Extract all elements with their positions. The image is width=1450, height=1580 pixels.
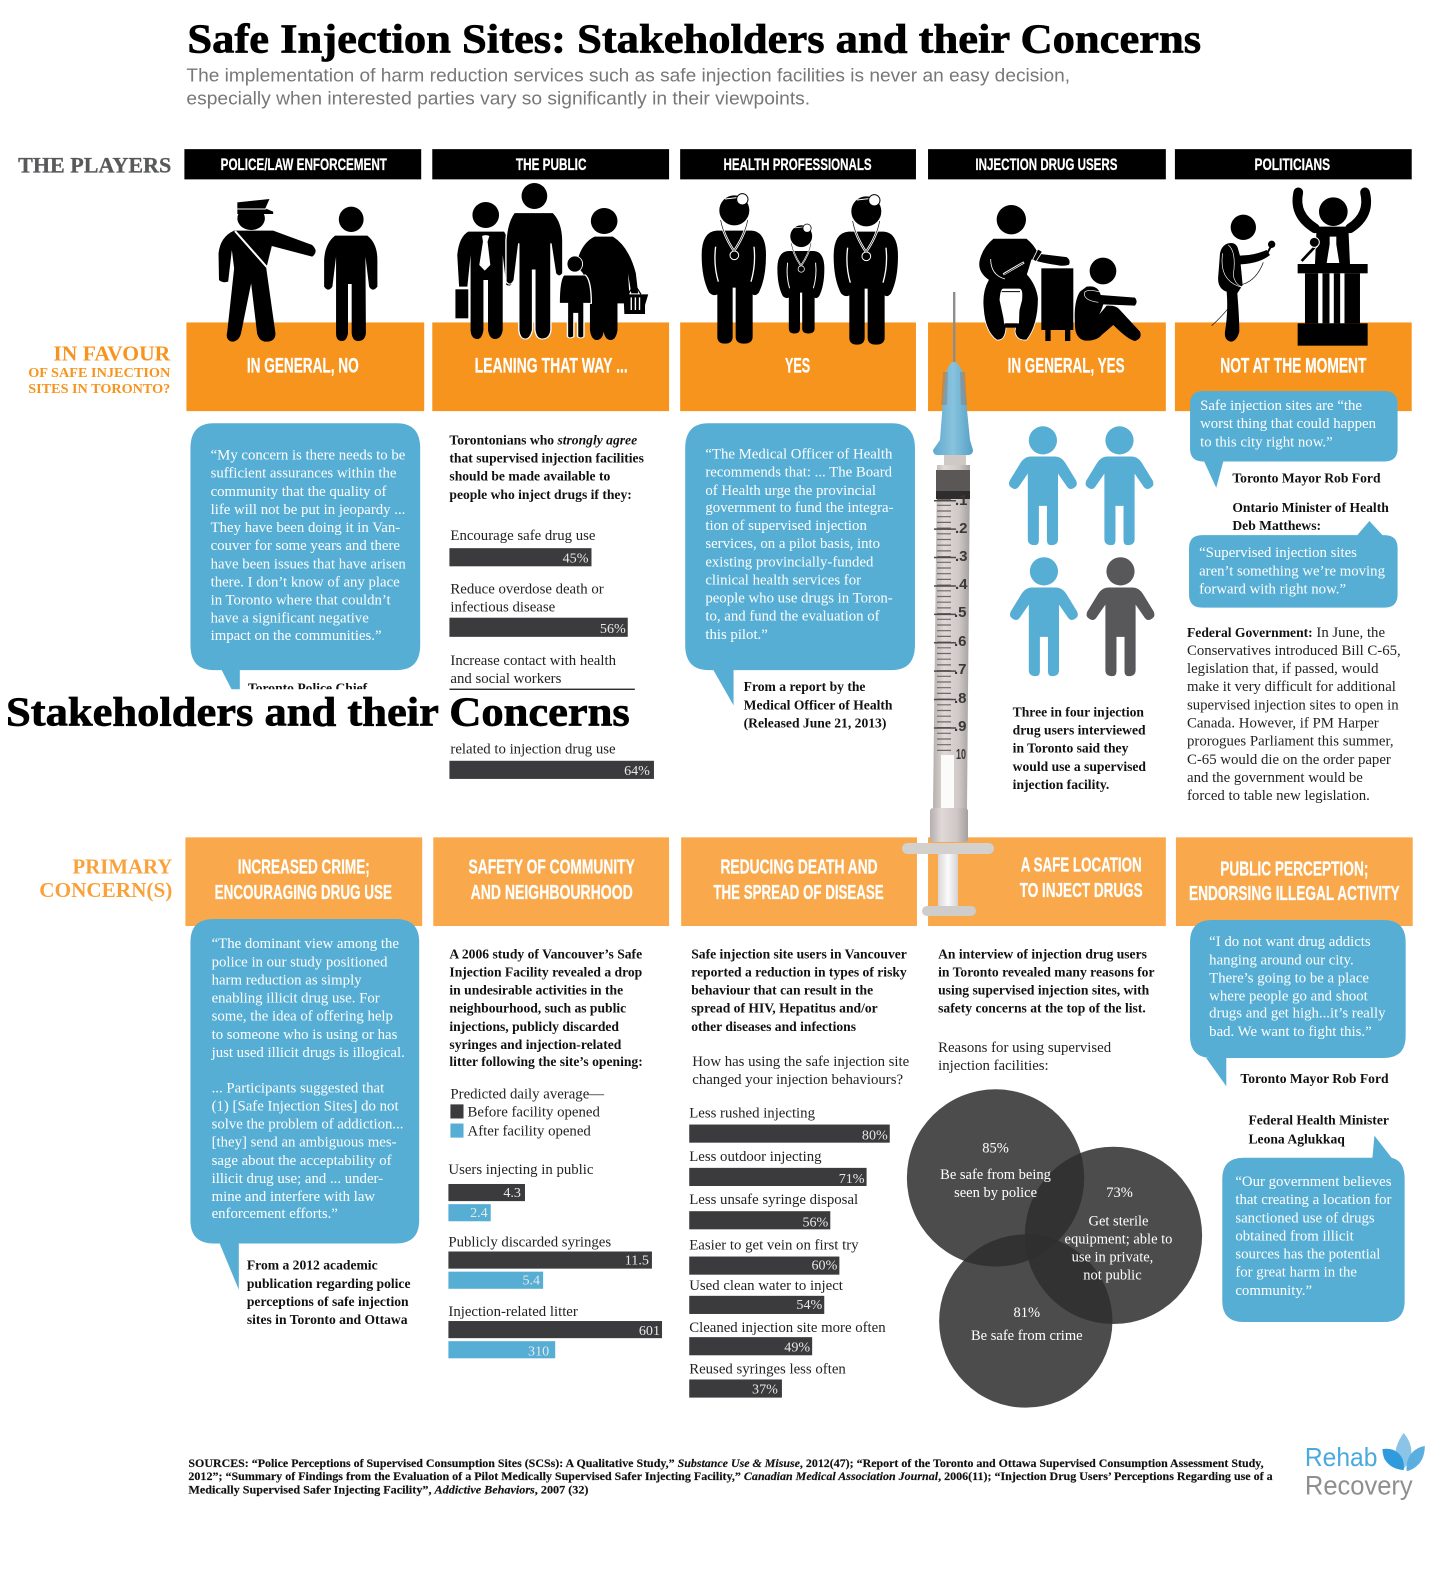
subtitle: The implementation of harm reduction services such as safe injection facilities is never an easy decision,	[186, 66, 1070, 86]
federal government note	[1187, 625, 1401, 804]
bar: increase contact: and social workers	[450, 671, 562, 687]
concern bar: health professionals: THE SPREAD OF DISEASE	[713, 882, 884, 904]
interview text: safety concerns at the top of the list.	[938, 1001, 1146, 1016]
source note: publication regarding police	[247, 1276, 411, 1291]
survey intro: should be made available to	[449, 469, 610, 484]
icon: police officer and man	[219, 199, 377, 342]
attribution: Medical Officer of Health	[744, 697, 893, 712]
bar: reduce overdose	[449, 582, 628, 637]
statistic text: in Toronto said they	[1013, 741, 1129, 756]
study text: behaviour that can result in the	[691, 983, 873, 998]
bar: reused syringes	[689, 1361, 846, 1398]
header: police	[184, 149, 421, 179]
quote text: community that the quality of	[211, 484, 387, 500]
panel: reducing disease	[689, 946, 910, 1398]
study text	[449, 946, 643, 1069]
quote text: solve the problem of addiction...	[212, 1117, 404, 1133]
header: health professionals	[680, 149, 916, 179]
quote text: have a significant negative	[211, 611, 369, 627]
venn diagram	[907, 1089, 1202, 1408]
quote text: people who use drugs in Toron-	[705, 591, 893, 607]
panel: police concern	[190, 919, 419, 1327]
quote: Rob Ford: “I do not want drug addicts	[1209, 934, 1371, 950]
illustration: syringe: .6	[954, 633, 966, 650]
quote: Leona Aglukkaq: “Our government believes	[1235, 1174, 1392, 1190]
icon: person 1	[1009, 426, 1077, 545]
favour bar: drug users: IN GENERAL, YES	[1008, 354, 1125, 377]
illustration: syringe: .8	[954, 690, 966, 707]
survey intro: people who inject drugs if they:	[449, 487, 632, 502]
icon: leaves	[1382, 1433, 1425, 1471]
quote text: [they] send an ambiguous mes-	[212, 1135, 397, 1151]
quote text: life will not be put in jeopardy ...	[211, 502, 405, 518]
bar: less outdoor	[689, 1149, 867, 1187]
icon: politicians at podium	[1212, 192, 1368, 346]
quote text: tion of supervised injection	[705, 518, 867, 534]
survey intro: that supervised injection facilities	[449, 451, 644, 466]
quote: Deb Matthews	[1199, 545, 1386, 598]
chart question	[692, 1054, 910, 1088]
panel: police quote	[190, 423, 420, 705]
attribution: Rob Ford: Toronto Mayor Rob Ford	[1240, 1071, 1389, 1086]
doctor 3	[834, 195, 898, 345]
concern bar: health professionals	[681, 837, 917, 926]
row label: in favour	[28, 342, 171, 397]
concern bar: public: AND NEIGHBOURHOOD	[471, 882, 633, 904]
study text: Safe injection site users in Vancouver	[691, 946, 907, 961]
study text: reported a reduction in types of risky	[691, 964, 907, 979]
bar: related to injection drug use: 64%	[624, 763, 650, 779]
bar: less rushed: Less rushed injecting	[689, 1105, 816, 1121]
panel: safe location	[907, 946, 1202, 1408]
favour bar: health professionals: YES	[785, 354, 810, 377]
bar: encourage safe drug use: 45%	[563, 550, 589, 566]
interview text: in Toronto revealed many reasons for	[938, 964, 1155, 979]
source note	[247, 1258, 411, 1327]
chart: publicly discarded syringes: 5.4	[522, 1273, 540, 1289]
quote text: government to fund the integra-	[705, 500, 894, 516]
icon: three doctors	[702, 194, 898, 345]
concern bar: drug users: A SAFE LOCATION	[1021, 855, 1142, 877]
title: Safe Injection Sites: Stakeholders and their Concerns	[187, 15, 1201, 61]
quote text: sage about the acceptability of	[212, 1153, 392, 1169]
concern bar: police: ENCOURAGING DRUG USE	[215, 882, 392, 904]
row label: primary concerns: CONCERN(S)	[39, 878, 172, 902]
federal government note: Federal Government: In June, the	[1187, 625, 1385, 641]
sources	[188, 1457, 1273, 1496]
logo: Rehab Recovery	[1305, 1433, 1425, 1500]
bar: cleaned site	[689, 1320, 886, 1355]
bar: related to injection drug use: related to injection drug use	[450, 742, 616, 758]
bar: reduce overdose: infectious disease	[450, 600, 556, 616]
chart: users injecting in public: 2.4	[470, 1205, 488, 1221]
row label: primary concerns: PRIMARY	[73, 855, 172, 879]
row label: in favour: SITES IN TORONTO?	[28, 381, 170, 397]
concern bar: public: SAFETY OF COMMUNITY	[469, 857, 635, 879]
quote: Leona Aglukkaq: for great harm in the	[1235, 1265, 1357, 1281]
bar: less unsafe disposal	[689, 1192, 858, 1230]
study text: Injection Facility revealed a drop	[449, 964, 643, 979]
quote: Rob Ford: Safe injection sites are “the	[1200, 398, 1362, 414]
chart: users injecting in public: Users injecting in public	[448, 1162, 594, 1178]
study text: A 2006 study of Vancouver’s Safe	[449, 946, 642, 961]
speech bubble: Leona Aglukkaq	[1222, 1136, 1405, 1322]
speech bubble: Rob Ford	[1190, 920, 1406, 1086]
study text: spread of HIV, Hepatitus and/or	[691, 1001, 878, 1016]
quote text: enforcement efforts.”	[212, 1206, 338, 1222]
quote text: in Toronto where that couldn’t	[211, 593, 392, 609]
statistic text: Three in four injection	[1013, 704, 1144, 719]
quote text: some, the idea of offering help	[212, 1009, 393, 1025]
statistic text: injection facility.	[1013, 777, 1109, 792]
speech bubble	[190, 423, 420, 705]
attribution: Rob Ford: Toronto Mayor Rob Ford	[1232, 471, 1381, 486]
federal government note: C-65 would die on the order paper	[1187, 752, 1391, 768]
quote: Leona Aglukkaq: that creating a location for	[1235, 1192, 1392, 1208]
illustration: syringe: .2	[955, 520, 967, 537]
quote text: just used illicit drugs is illogical.	[211, 1045, 405, 1061]
legend	[450, 1086, 604, 1140]
quote text: recommends that: ... The Board	[705, 465, 893, 481]
concern bar: police	[185, 837, 422, 926]
concern bar: drug users	[928, 837, 1166, 926]
venn diagram: use in private,	[1072, 1250, 1153, 1266]
attribution: (Released June 21, 2013)	[744, 716, 886, 732]
quote text: of Health urge the provincial	[705, 483, 876, 499]
interview text: An interview of injection drug users	[938, 946, 1147, 961]
quote: Deb Matthews: aren’t something we’re moving	[1199, 563, 1386, 579]
quote text: have been issues that have arisen	[211, 556, 406, 572]
quote: Rob Ford: worst thing that could happen	[1200, 416, 1377, 432]
bar: less unsafe disposal: Less unsafe syringe disposal	[689, 1192, 858, 1208]
bar: reduce overdose: 56%	[600, 621, 626, 637]
quote text	[211, 936, 405, 1222]
interview text: using supervised injection sites, with	[938, 983, 1150, 998]
interview text	[938, 946, 1155, 1016]
bar: clean water: 54%	[796, 1297, 822, 1313]
study text: other diseases and infections	[691, 1019, 856, 1034]
header: public: THE PUBLIC	[516, 155, 586, 174]
header: health professionals: HEALTH PROFESSIONALS	[723, 155, 872, 174]
panel: public survey	[449, 432, 644, 687]
chart heading	[938, 1040, 1112, 1074]
quote: Leona Aglukkaq	[1235, 1174, 1392, 1299]
quote text: impact on the communities.”	[211, 628, 382, 644]
bar: clean water	[689, 1278, 844, 1314]
attribution: Deb Matthews: Ontario Minister of Health	[1232, 500, 1389, 515]
quote text: ... Participants suggested that	[212, 1080, 385, 1096]
bar: cleaned site: 49%	[784, 1339, 810, 1355]
quote text: couver for some years and there	[211, 538, 400, 554]
source note: perceptions of safe injection	[247, 1294, 409, 1309]
venn diagram: 73%	[1106, 1185, 1133, 1201]
chart heading: injection facilities:	[938, 1058, 1049, 1074]
federal government note: forced to table new legislation.	[1187, 788, 1370, 804]
study text: litter following the site’s opening:	[449, 1054, 643, 1069]
doctor 2	[777, 224, 824, 334]
federal government note: Canada. However, if PM Harper	[1187, 716, 1379, 732]
quote text: police in our study positioned	[212, 954, 388, 970]
bar: easier vein: Easier to get vein on first try	[689, 1237, 859, 1253]
study text: syringes and injection-related	[449, 1037, 622, 1052]
icon: person 4	[1087, 557, 1154, 676]
statistic text	[1013, 704, 1146, 792]
doctor 1	[702, 194, 766, 344]
quote text: to, and fund the evaluation of	[705, 609, 880, 625]
venn diagram: 85%	[982, 1141, 1009, 1157]
chart heading: Reasons for using supervised	[938, 1040, 1112, 1056]
illustration: syringe: .7	[954, 661, 966, 678]
attribution: Toronto Police Chief	[248, 680, 368, 695]
quote: Leona Aglukkaq: community.”	[1235, 1283, 1312, 1299]
quote text: this pilot.”	[705, 627, 768, 643]
bar: easier vein: 60%	[812, 1258, 838, 1274]
illustration: syringe: .4	[955, 576, 968, 593]
quote text: there. I don’t know of any place	[211, 574, 400, 590]
quote: Rob Ford	[1200, 398, 1377, 450]
quote text: “My concern is there needs to be	[211, 447, 406, 463]
quote text: services, on a pilot basis, into	[705, 536, 880, 552]
header: injection drug users	[928, 149, 1166, 179]
attribution: Leona Aglukkaq: Federal Health Minister	[1248, 1113, 1389, 1128]
quote text: “The Medical Officer of Health	[705, 446, 893, 462]
speech bubble: Deb Matthews	[1189, 521, 1398, 608]
row label: in favour: OF SAFE INJECTION	[28, 365, 170, 381]
quote text: “The dominant view among the	[212, 936, 399, 952]
header: politicians	[1175, 149, 1412, 179]
quote text: They have been doing it in Van-	[211, 520, 400, 536]
chart: publicly discarded syringes: 11.5	[625, 1253, 649, 1269]
source note: sites in Toronto and Ottawa	[247, 1312, 408, 1327]
panel: drug user pictogram	[1009, 426, 1154, 792]
quote text	[211, 447, 406, 644]
bar: easier vein	[689, 1237, 859, 1275]
attribution: Deb Matthews	[1232, 500, 1389, 533]
bar: clean water: Used clean water to inject	[689, 1278, 844, 1294]
attribution: Leona Aglukkaq: Leona Aglukkaq	[1248, 1132, 1345, 1147]
favour bar: public: LEANING THAT WAY ...	[475, 354, 628, 377]
attribution	[744, 679, 893, 732]
illustration: syringe: .9	[954, 718, 966, 735]
bar: less rushed: 80%	[862, 1128, 888, 1144]
subtitle: especially when interested parties vary so significantly in their viewpoints.	[186, 88, 810, 108]
sources: Medically Supervised Safer Injecting Facility”, Addictive Behaviors , 2007 (32)	[188, 1483, 589, 1496]
speech bubble	[685, 423, 915, 705]
venn diagram: seen by police	[954, 1185, 1037, 1201]
illustration: syringe: .3	[955, 548, 967, 565]
bar: reused syringes: Reused syringes less often	[689, 1361, 846, 1377]
quote: Leona Aglukkaq: sources has the potential	[1235, 1247, 1380, 1263]
attribution: Deb Matthews: Deb Matthews:	[1232, 518, 1321, 533]
bar: reduce overdose: Reduce overdose death or	[450, 582, 604, 598]
quote: Rob Ford	[1209, 934, 1386, 1040]
quote: Rob Ford: There’s going to be a place	[1209, 970, 1369, 986]
favour bar: health professionals	[680, 322, 916, 411]
sources: SOURCES: “Police Perceptions of Supervised Consumption Sites (SCSs): A Qualitative Study,” Substance Use & Misuse , 2012(47); “Report of the Toronto and Ottawa Supervised Consumption Assessment Study,	[188, 1457, 1264, 1470]
concern bar: politicians: PUBLIC PERCEPTION;	[1220, 859, 1368, 881]
header: police: POLICE/LAW ENFORCEMENT	[221, 155, 387, 174]
header: injection drug users: INJECTION DRUG USERS	[975, 155, 1117, 174]
favour bar: politicians	[1175, 322, 1412, 411]
quote: Deb Matthews: “Supervised injection sites	[1199, 545, 1357, 561]
chart: injection-related litter: 601	[639, 1323, 660, 1339]
federal government note: legislation that, if passed, would	[1187, 661, 1379, 677]
legend: Before facility opened	[468, 1104, 600, 1120]
bar: less outdoor: 71%	[839, 1171, 865, 1187]
quote text	[705, 446, 894, 643]
favour bar: public	[432, 322, 669, 411]
attribution: Leona Aglukkaq	[1248, 1113, 1389, 1147]
bar: less unsafe disposal: 56%	[802, 1214, 829, 1230]
quote text: illicit drug use; and ... under-	[212, 1171, 383, 1187]
chart: users injecting in public	[448, 1162, 594, 1221]
logo: Rehab Recovery: Rehab	[1305, 1442, 1377, 1472]
subtitle	[186, 66, 1070, 108]
chart: injection-related litter	[448, 1304, 662, 1359]
federal government note: supervised injection sites to open in	[1187, 697, 1399, 713]
bar: encourage safe drug use	[449, 528, 596, 566]
quote text: sufficient assurances within the	[211, 466, 397, 482]
federal government note: prorogues Parliament this summer,	[1187, 734, 1394, 750]
illustration: syringe: .1	[955, 492, 967, 509]
title band overlay: Stakeholders and their Concerns	[6, 689, 630, 735]
concern bar: police: INCREASED CRIME;	[238, 857, 370, 879]
chart: publicly discarded syringes	[448, 1234, 652, 1289]
venn diagram: Be safe from crime	[971, 1328, 1083, 1344]
quote: Rob Ford: drugs and get high...it’s really	[1209, 1006, 1386, 1022]
survey intro	[449, 432, 644, 502]
row label: primary concerns	[39, 855, 172, 902]
quote text: clinical health services for	[705, 572, 861, 588]
legend: After facility opened	[468, 1124, 591, 1140]
chart: injection-related litter: 310	[528, 1343, 549, 1359]
bar: encourage safe drug use: Encourage safe drug use	[450, 528, 596, 544]
statistic text: drug users interviewed	[1013, 723, 1146, 738]
bar: related to injection drug use	[449, 742, 654, 779]
quote: Deb Matthews: forward with right now.”	[1199, 582, 1346, 598]
legend: Predicted daily average—	[450, 1086, 604, 1102]
row label: the players: THE PLAYERS	[18, 152, 171, 177]
quote text: to someone who is using or has	[212, 1027, 398, 1043]
venn diagram: equipment; able to	[1065, 1231, 1172, 1247]
study text: neighbourhood, such as public	[449, 1001, 626, 1016]
panel: community safety	[448, 946, 662, 1359]
chart: users injecting in public: 4.3	[503, 1185, 521, 1201]
statistic text: would use a supervised	[1013, 759, 1146, 774]
panel: health quote	[685, 423, 915, 732]
bar: less rushed	[689, 1105, 890, 1144]
header: public	[432, 149, 669, 179]
sources: 2012”; “Summary of Findings from the Evaluation of a Pilot Medically Supervised Safer Injecting Facility,” Canadian Medical Association Journal , 2006(11); “Injection Drug Users’ Perceptions Regarding use of a	[188, 1470, 1273, 1483]
venn diagram: 81%	[1013, 1305, 1040, 1321]
row label: in favour: IN FAVOUR	[53, 342, 171, 366]
favour bar: police: IN GENERAL, NO	[247, 354, 359, 377]
concern bar: politicians	[1176, 837, 1413, 926]
panel: public perception	[1190, 920, 1406, 1322]
logo: Rehab Recovery: Recovery	[1305, 1469, 1413, 1500]
speech bubble	[190, 919, 419, 1290]
quote text: mine and interfere with law	[212, 1189, 375, 1205]
attribution: From a report by the	[744, 679, 865, 694]
icon: injecting users at a cabinet	[979, 205, 1141, 341]
icon: family of four	[455, 183, 648, 340]
quote text: existing provincially-funded	[705, 554, 874, 570]
source note: From a 2012 academic	[247, 1258, 378, 1273]
illustration: syringe	[902, 292, 994, 916]
chart: publicly discarded syringes: Publicly discarded syringes	[448, 1234, 611, 1250]
study text: injections, publicly discarded	[449, 1019, 619, 1034]
panel: politicians quotes	[1187, 391, 1401, 804]
quote: Rob Ford: bad. We want to fight this.”	[1209, 1024, 1372, 1040]
concern bar: public	[433, 837, 669, 926]
quote: Rob Ford: where people go and shoot	[1209, 989, 1369, 1005]
illustration: syringe: 10	[956, 746, 966, 763]
quote: Leona Aglukkaq: sanctioned use of drugs	[1235, 1210, 1375, 1226]
federal government note: and the government would be	[1187, 770, 1363, 786]
chart question: changed your injection behaviours?	[692, 1072, 903, 1088]
venn diagram: not public	[1083, 1268, 1142, 1284]
icon: person 2	[1086, 426, 1153, 545]
quote: Rob Ford: hanging around our city.	[1209, 952, 1354, 968]
federal government note: make it very difficult for additional	[1187, 679, 1396, 695]
study text: in undesirable activities in the	[449, 983, 623, 998]
quote text: enabling illicit drug use. For	[212, 991, 380, 1007]
venn diagram: Be safe from being	[940, 1167, 1051, 1183]
favour bar: police	[186, 322, 424, 411]
favour bar: drug users	[928, 322, 1166, 411]
bar: reused syringes: 37%	[752, 1382, 778, 1398]
federal government note: Conservatives introduced Bill C-65,	[1187, 643, 1401, 659]
concern bar: drug users: TO INJECT DRUGS	[1020, 880, 1143, 902]
illustration: syringe: .5	[954, 604, 966, 621]
bar: less outdoor: Less outdoor injecting	[689, 1149, 822, 1165]
quote: Rob Ford: to this city right now.”	[1200, 434, 1333, 450]
quote text: (1) [Safe Injection Sites] do not	[212, 1098, 399, 1114]
study text	[691, 946, 907, 1034]
concern bar: health professionals: REDUCING DEATH AND	[720, 857, 878, 879]
favour bar: politicians: NOT AT THE MOMENT	[1220, 354, 1366, 377]
bar: increase contact	[450, 653, 617, 687]
icon: person 3	[1010, 557, 1078, 676]
quote: Leona Aglukkaq: obtained from illicit	[1235, 1228, 1355, 1244]
quote text: harm reduction as simply	[212, 972, 362, 988]
header: politicians: POLITICIANS	[1255, 155, 1330, 174]
venn diagram: Get sterile	[1088, 1213, 1148, 1229]
survey intro: Torontonians who strongly agree	[449, 432, 637, 447]
bar: cleaned site: Cleaned injection site more often	[689, 1320, 886, 1336]
speech bubble: Rob Ford	[1190, 391, 1398, 488]
bar: increase contact: Increase contact with health	[450, 653, 617, 669]
chart: injection-related litter: Injection-related litter	[448, 1304, 578, 1320]
chart question: How has using the safe injection site	[692, 1054, 910, 1070]
